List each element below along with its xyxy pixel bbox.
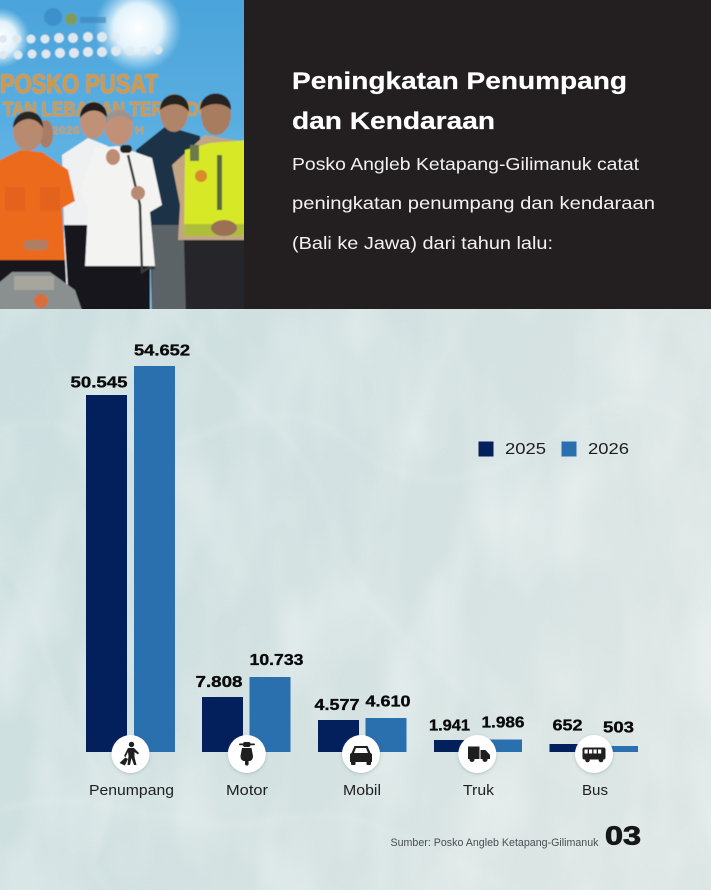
group: Mobil <box>314 694 411 799</box>
group: Mobil: Mobil <box>343 783 381 799</box>
group: Motor: Motor <box>226 783 268 799</box>
group: Bus: 652 <box>552 718 583 734</box>
group: Penumpang: Penumpang <box>89 783 174 799</box>
icon: car <box>350 746 372 765</box>
group: Bus: Bus <box>582 783 608 799</box>
description text: peningkatan penumpang dan kendaraan <box>292 193 655 213</box>
page number: 03 <box>605 820 641 850</box>
legend: 2025 <box>505 441 546 458</box>
speaker in white shirt <box>80 109 162 319</box>
heading <box>292 68 627 135</box>
description text <box>292 154 655 253</box>
bar chart <box>70 342 638 799</box>
description text: Posko Angleb Ketapang-Gilimanuk catat <box>292 154 639 174</box>
panel: water texture background <box>0 309 711 890</box>
group: Truk: 1.986 <box>482 714 525 732</box>
group: Penumpang: 50.545 <box>70 374 128 392</box>
heading: dan Kendaraan <box>292 108 495 135</box>
group: Motor: 7.808 <box>196 674 243 691</box>
group: Mobil: 4.610 <box>366 694 411 710</box>
group: Truk <box>429 714 525 799</box>
backdrop banner: TAN LEBARAN TERPADU <box>3 99 211 121</box>
group: Motor: 10.733 <box>250 652 304 669</box>
police officer with yellow vest <box>171 93 244 309</box>
icon: traveller with suitcase <box>120 742 139 766</box>
backdrop banner: POSKO PUSAT <box>0 69 158 99</box>
backdrop banner <box>0 0 254 319</box>
description text: (Bali ke Jawa) dari tahun lalu: <box>292 233 553 253</box>
group: Truk: Truk <box>463 783 495 799</box>
icon: truck <box>468 746 490 762</box>
group: Penumpang: 54.652 <box>134 342 190 360</box>
panel: photo of press conference <box>0 0 254 319</box>
panel: dark title area <box>244 0 711 309</box>
camera foreground <box>0 271 82 309</box>
orange vest man <box>0 110 76 284</box>
source note: Sumber: Posko Angleb Ketapang-Gilimanuk <box>390 837 599 849</box>
icon: scooter <box>239 742 255 766</box>
backdrop banner: 2026 M / 1447 H <box>52 125 144 137</box>
legend <box>478 441 629 458</box>
man in white behind <box>62 102 108 319</box>
legend: 2026 <box>588 441 629 458</box>
heading: Peningkatan Penumpang <box>292 68 627 95</box>
group: Motor <box>196 652 304 799</box>
group: Bus <box>550 718 638 799</box>
group: Mobil: 4.577 <box>314 697 360 714</box>
icon: bus <box>582 748 606 762</box>
group: Bus: 503 <box>603 720 634 736</box>
dark-shirt officer <box>136 94 202 319</box>
group: Penumpang <box>70 342 190 799</box>
group: Truk: 1.941 <box>429 718 470 734</box>
